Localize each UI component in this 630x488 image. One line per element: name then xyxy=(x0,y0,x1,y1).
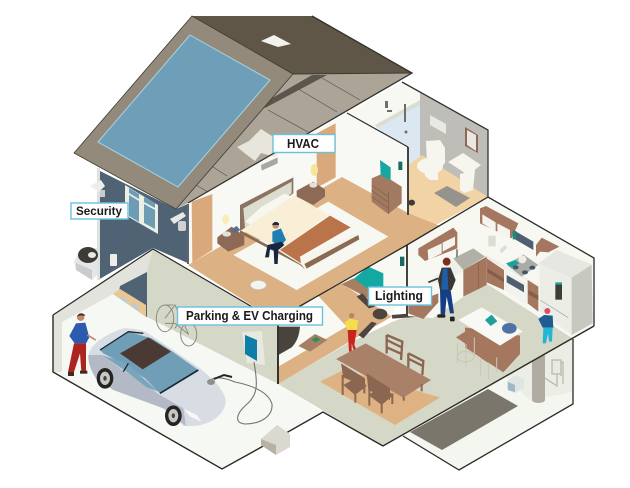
label: HVAC: HVAC xyxy=(287,137,319,151)
tablet xyxy=(485,315,497,326)
child in blue xyxy=(538,308,553,343)
lounge chair xyxy=(278,327,300,355)
roof underside xyxy=(176,73,412,209)
television xyxy=(380,160,391,181)
label: Lighting xyxy=(368,287,432,305)
thermostat living room xyxy=(400,257,404,266)
wall socket xyxy=(110,254,117,266)
dining rug xyxy=(320,370,440,425)
living room wing xyxy=(278,245,407,384)
support column xyxy=(532,355,545,403)
label: Security: Security xyxy=(76,204,122,218)
blanket xyxy=(280,216,351,263)
kitchen island xyxy=(456,307,523,379)
dining area xyxy=(320,335,440,425)
back chairs xyxy=(387,335,423,375)
shower fittings xyxy=(385,101,408,134)
microwave xyxy=(513,230,533,250)
island body xyxy=(465,327,520,372)
garage contents xyxy=(68,305,226,426)
EV charger xyxy=(242,331,265,365)
stove xyxy=(506,254,538,277)
label: Parking & EV Charging: Parking & EV Charging xyxy=(186,309,313,323)
roof front slope xyxy=(74,16,293,209)
basement mat xyxy=(410,389,518,450)
solar panel xyxy=(98,35,270,187)
water heater pipes xyxy=(545,360,563,386)
robot vacuum xyxy=(250,280,266,290)
toilet xyxy=(417,140,445,180)
kitchen xyxy=(408,206,593,343)
lamp left xyxy=(222,214,229,224)
bed xyxy=(240,177,359,269)
bowl xyxy=(502,323,517,334)
tan hallway floor xyxy=(278,283,392,384)
child in yellow xyxy=(344,313,358,352)
dehumidifier xyxy=(507,375,524,393)
air conditioning unit xyxy=(74,247,98,280)
front chairs xyxy=(341,363,393,413)
bedroom contents xyxy=(192,123,415,290)
left door xyxy=(192,194,212,263)
bicycle xyxy=(156,305,197,346)
bedroom rug xyxy=(233,202,388,290)
wall camera xyxy=(170,212,186,231)
bedroom floor xyxy=(188,177,440,322)
bedroom walls xyxy=(188,113,408,265)
woman in kitchen xyxy=(428,258,456,321)
blue exterior wall xyxy=(98,170,190,280)
bedside table left xyxy=(217,226,244,252)
electric car xyxy=(88,328,226,426)
lamp right xyxy=(311,164,318,176)
HVAC vent xyxy=(261,157,278,171)
car windows xyxy=(100,332,198,393)
wall separator xyxy=(407,147,409,215)
bathroom floor xyxy=(408,155,488,228)
window xyxy=(125,185,158,234)
bedside table right xyxy=(297,182,325,205)
towel rack xyxy=(430,115,446,134)
oven xyxy=(505,270,527,305)
security camera pole xyxy=(90,168,105,280)
basement xyxy=(403,339,573,470)
living floor xyxy=(278,284,594,446)
bathroom xyxy=(347,82,488,228)
dining table xyxy=(336,343,431,401)
refrigerator xyxy=(538,250,593,335)
coffee maker and toaster xyxy=(488,236,507,253)
left upper cabinet xyxy=(418,228,457,261)
charging cable xyxy=(207,362,272,424)
kitchen wall xyxy=(407,197,594,338)
skylight xyxy=(261,35,291,47)
person on bed xyxy=(265,222,286,264)
garage floor xyxy=(53,294,323,469)
bath mat xyxy=(434,186,470,207)
stair treads xyxy=(342,278,377,298)
dresser xyxy=(372,174,402,214)
sink xyxy=(453,248,485,270)
label: Lighting: Lighting xyxy=(375,289,423,303)
bedroom wall outline xyxy=(347,113,408,147)
outdoor battery box xyxy=(261,425,290,455)
ceiling fan xyxy=(357,293,420,338)
right upper cabinet xyxy=(480,206,518,238)
garage walls xyxy=(53,249,278,384)
floor outlines xyxy=(53,315,594,469)
teal sofa xyxy=(352,267,383,293)
sunroof xyxy=(120,337,171,369)
sink xyxy=(448,153,481,193)
thermostat bedroom xyxy=(398,162,402,170)
base cabinet by door xyxy=(408,293,438,319)
lower cabinets xyxy=(463,257,538,312)
headlight xyxy=(183,408,202,422)
side window xyxy=(102,355,158,392)
wheels xyxy=(97,368,182,426)
right door xyxy=(317,123,336,187)
small upper cabinet xyxy=(536,238,559,257)
man in garage xyxy=(68,313,96,376)
mirror xyxy=(465,127,478,153)
roof back slope xyxy=(192,16,412,74)
stools xyxy=(457,337,497,379)
label: HVAC xyxy=(273,134,335,152)
counter xyxy=(428,255,538,285)
dog bed xyxy=(408,200,415,206)
side table xyxy=(298,334,327,352)
